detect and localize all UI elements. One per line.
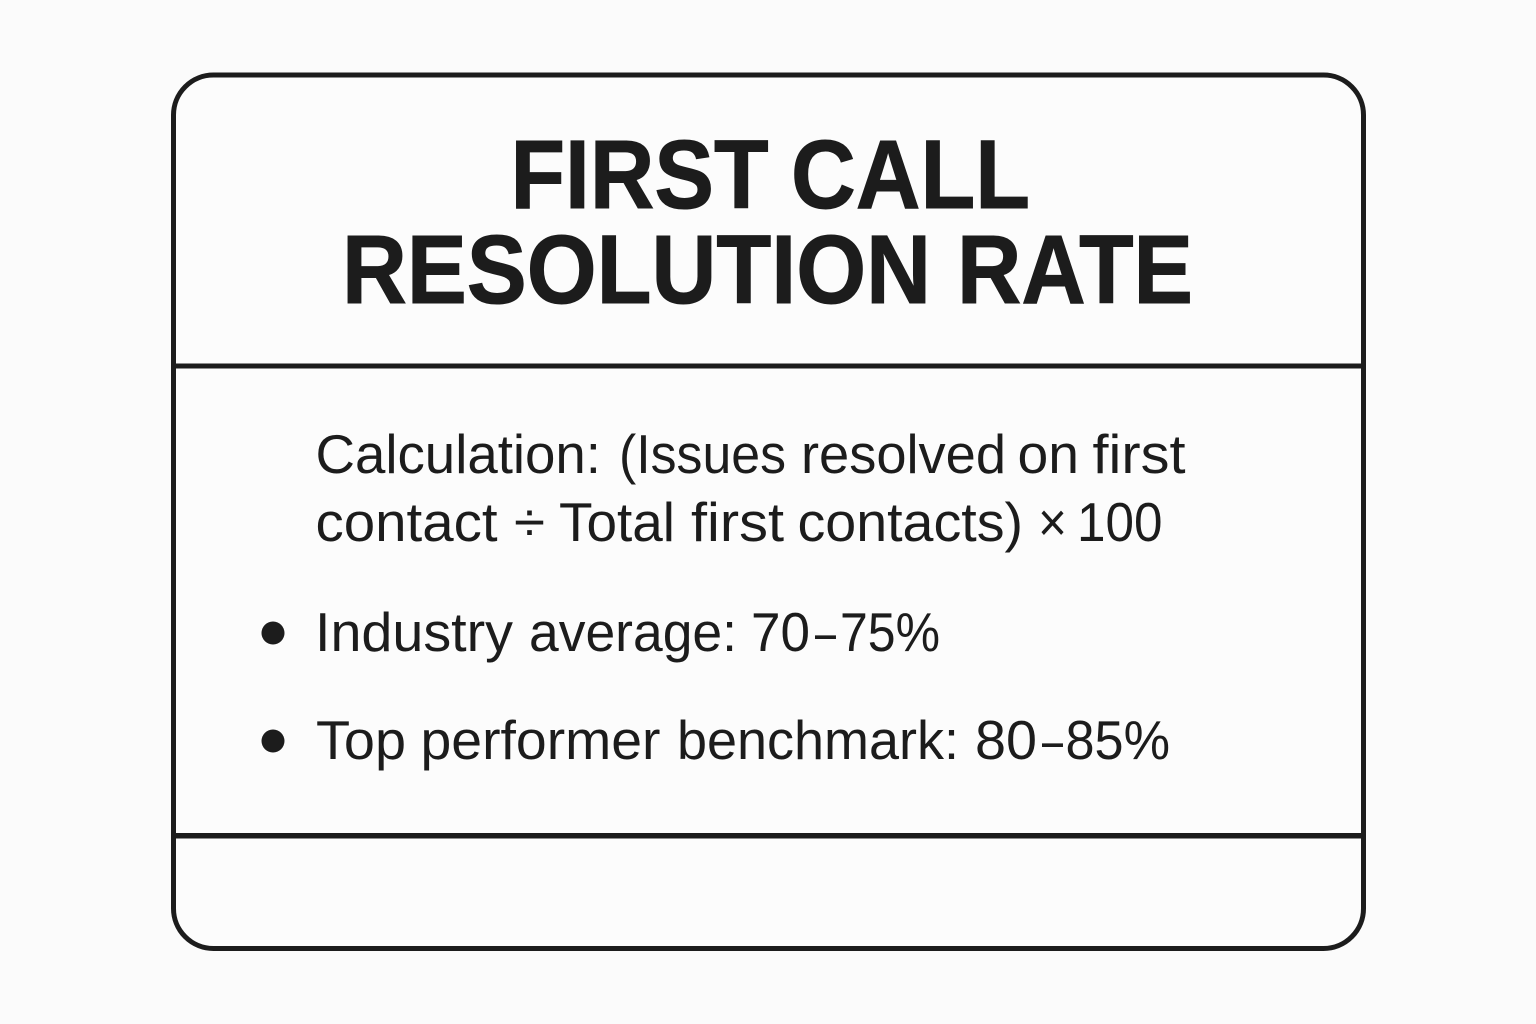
industry average text: – [815,601,836,663]
formula line 2: ÷ [514,491,545,553]
title [342,120,1193,324]
card outline [174,75,1364,948]
formula line 2: 100 [1077,491,1162,553]
formula line 1 [316,423,1186,485]
formula line 1: Calculation: [316,423,601,485]
text block: calculation formula [316,423,1186,553]
industry average text: 70 [751,601,810,663]
industry average text [315,601,940,663]
top performer text: 85% [1066,709,1170,771]
bullet: industry average [262,601,940,663]
industry average text: 75% [840,601,940,663]
bullet: top performer benchmark [262,709,1170,771]
formula line 2: Total [559,491,675,553]
formula line 2: × [1038,491,1067,553]
top performer text [316,709,1170,771]
industry average text: Industry [315,601,513,663]
top performer text: 80 [975,709,1037,771]
title line 1: FIRST [510,120,768,229]
formula line 1: first [1092,423,1186,485]
top performer text: benchmark: [677,709,959,771]
icon: bullet dot [262,622,284,644]
title line 1: CALL [791,120,1030,229]
title line 1 [510,120,1030,229]
title line 2: RATE [957,215,1193,324]
formula line 2: contact [316,491,498,553]
formula line 1: on [1018,423,1079,485]
icon: bullet dot [262,730,284,752]
formula line 2 [316,491,1162,553]
formula line 1: resolved [801,423,1006,485]
divider: footer [174,833,1364,838]
panel: card [174,75,1364,948]
formula line 2: contacts) [798,491,1023,553]
top performer text: performer [420,709,660,771]
divider: below title [174,364,1364,368]
industry average text: average: [529,601,737,663]
formula line 2: first [691,491,784,553]
top performer text: – [1042,709,1063,771]
formula line 1: (Issues [619,423,786,485]
top performer text: Top [316,709,406,771]
title line 2: RESOLUTION [342,215,931,324]
